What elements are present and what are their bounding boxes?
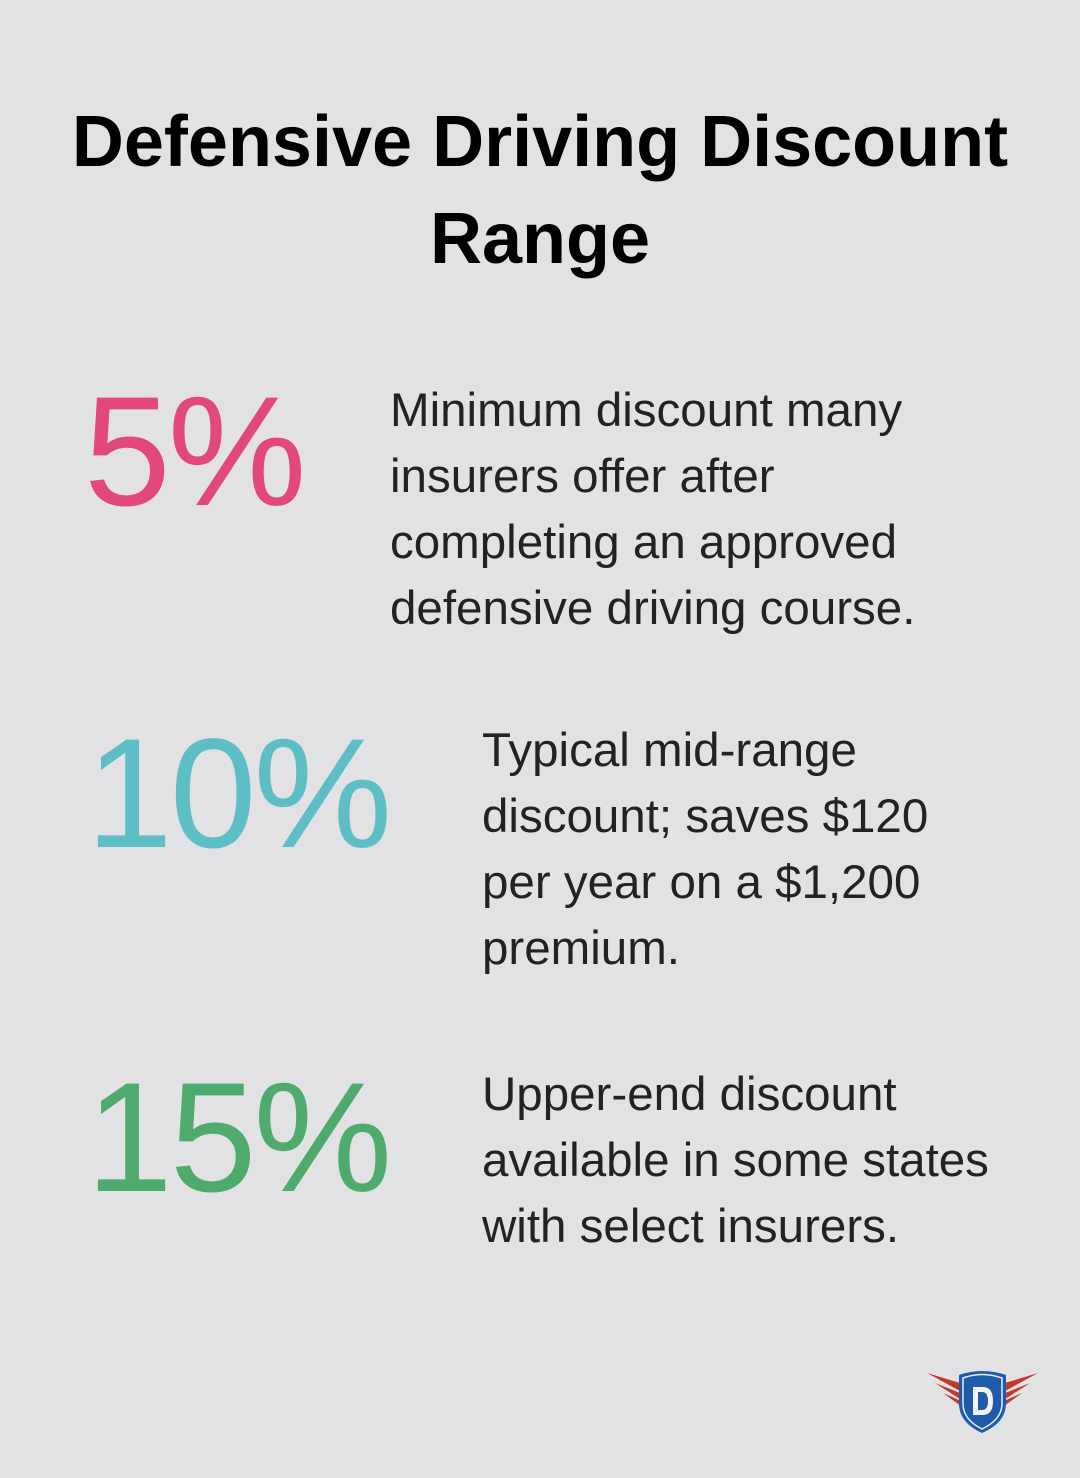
- description 5%: Minimum discount many insurers offer after completing an approved defensive driving course.: [390, 384, 915, 635]
- description 15%: Upper-end discount available in some states with select insurers.: [482, 1068, 989, 1253]
- title: [72, 102, 1008, 279]
- number 15%: 15%: [86, 1051, 389, 1225]
- stat: 15%: [86, 1051, 989, 1253]
- title: Defensive Driving Discount: [72, 102, 1008, 182]
- icon: logo shield with wings: [927, 1371, 1038, 1433]
- stat: 5%: [84, 365, 915, 635]
- description 10%: Typical mid-range discount; saves $120 per year on a $1,200 premium.: [482, 724, 928, 975]
- number 10%: 10%: [86, 707, 389, 881]
- title: Range: [430, 199, 650, 279]
- stat: 10%: [86, 707, 928, 975]
- number 5%: 5%: [84, 365, 303, 539]
